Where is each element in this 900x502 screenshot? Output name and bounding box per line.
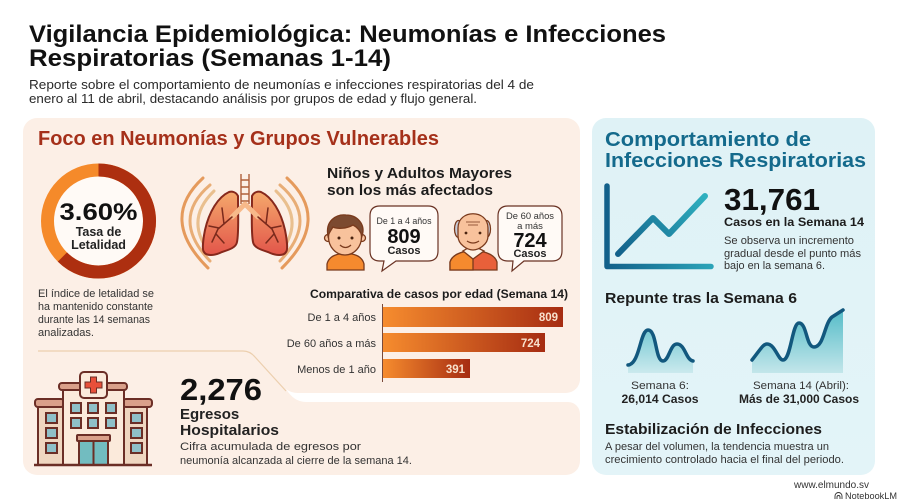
title: Respiratorias (Semanas 1-14) xyxy=(29,45,391,72)
subtitle: enero al 11 de abril, destacando análisis por grupos de edad y flujo general. xyxy=(29,92,477,106)
icon: lungs xyxy=(182,174,308,268)
icon: line chart xyxy=(607,186,711,266)
bar: menos de 1 año xyxy=(297,359,470,378)
stat: egresos hospitalarios: Hospitalarios xyxy=(180,422,279,439)
bar chart: comparativa xyxy=(287,287,568,382)
chart: semana 6: 26,014 Casos xyxy=(622,394,698,406)
stat: 31,761: Casos en la Semana 14 xyxy=(724,215,864,229)
bar: menos de 1 año: Menos de 1 año xyxy=(297,364,376,376)
bar: 60 años a más xyxy=(287,333,545,352)
donut: tasa de letalidad: Letalidad xyxy=(71,238,126,252)
source: www.elmundo.sv xyxy=(793,479,870,491)
heading: niños y adultos xyxy=(327,166,512,199)
letalidad description: El índice de letalidad se xyxy=(38,288,154,300)
panel heading: Infecciones Respiratorias xyxy=(605,149,866,172)
text: estabilización xyxy=(605,422,844,466)
bar: 1 a 4 años xyxy=(308,307,563,327)
letalidad description xyxy=(38,288,154,339)
callout: 724 casos: a más xyxy=(517,221,543,232)
chart: semana 6: Semana 6: xyxy=(631,380,689,392)
panel: infecciones respiratorias xyxy=(592,118,875,475)
bar chart: comparativa: Comparativa de casos por edad (Semana 14) xyxy=(310,287,568,301)
heading: niños y adultos: son los más afectados xyxy=(327,183,493,199)
notebooklm mark: NotebookLM xyxy=(845,491,897,502)
text: estabilización: Estabilización de Infecciones xyxy=(605,422,822,438)
callout: 724 casos: 724 xyxy=(513,230,548,252)
stat: 31,761: 31,761 xyxy=(724,182,820,217)
letalidad description: analizadas. xyxy=(38,327,94,339)
stat: 31,761 xyxy=(724,182,864,272)
chart: semana 14 xyxy=(739,310,859,406)
title: Vigilancia Epidemiológica: Neumonías e Infecciones xyxy=(29,21,666,48)
heading: repunte: Repunte tras la Semana 6 xyxy=(605,291,797,307)
text: estabilización: A pesar del volumen, la tendencia muestra un xyxy=(605,441,829,453)
stat: egresos hospitalarios: 2,276 xyxy=(180,373,262,407)
title xyxy=(29,21,666,72)
panel background xyxy=(592,118,875,475)
heading: niños y adultos: Niños y Adultos Mayores xyxy=(327,166,512,182)
bar: 60 años a más: De 60 años a más xyxy=(287,338,376,350)
donut: tasa de letalidad: Tasa de xyxy=(76,225,121,239)
stat: 31,761: Se observa un incremento xyxy=(724,235,854,247)
letalidad description: durante las 14 semanas xyxy=(38,314,150,326)
panel heading xyxy=(605,128,866,172)
callout: 724 casos xyxy=(498,206,562,271)
donut: tasa de letalidad xyxy=(48,170,150,272)
bar: 1 a 4 años: 809 xyxy=(539,312,558,324)
bar: 60 años a más: 724 xyxy=(521,338,541,350)
callout: 809 casos: Casos xyxy=(387,245,421,257)
separator xyxy=(38,351,286,391)
callout: 724 casos: De 60 años xyxy=(506,211,554,222)
panel heading: Comportamiento de xyxy=(605,128,811,151)
panel heading: Foco en Neumonías y Grupos Vulnerables xyxy=(38,127,439,150)
subtitle: Reporte sobre el comportamiento de neumonías e infecciones respiratorias del 4 de xyxy=(29,78,534,92)
icon: hospital xyxy=(34,372,152,465)
stat: egresos hospitalarios: Cifra acumulada de egresos por xyxy=(180,441,361,453)
callout: 809 casos: 809 xyxy=(387,226,421,248)
stat: 31,761: gradual desde el punto más xyxy=(724,248,861,260)
chart: semana 14: Semana 14 (Abril): xyxy=(753,380,849,392)
subtitle xyxy=(29,78,534,106)
stat: egresos hospitalarios xyxy=(180,373,412,467)
icon: elder xyxy=(450,214,497,270)
stat: 31,761: bajo en la semana 6. xyxy=(724,260,825,272)
callout: 724 casos: Casos xyxy=(513,248,547,260)
callout: 809 casos: De 1 a 4 años xyxy=(376,216,432,227)
stat: egresos hospitalarios: neumonía alcanzada al cierre de la semana 14. xyxy=(180,455,412,467)
chart: semana 14: Más de 31,000 Casos xyxy=(739,394,859,406)
icon: child xyxy=(324,215,366,270)
bar: menos de 1 año: 391 xyxy=(446,364,466,376)
stat: egresos hospitalarios: Egresos xyxy=(180,406,239,423)
bar: 1 a 4 años: De 1 a 4 años xyxy=(308,312,376,324)
chart: semana 6 xyxy=(622,330,698,406)
panel: neumonías xyxy=(23,118,580,475)
letalidad description: ha mantenido constante xyxy=(38,301,153,313)
panel background xyxy=(23,118,580,475)
callout: 809 casos xyxy=(370,206,438,271)
text: estabilización: crecimiento controlado hacia el final del periodo. xyxy=(605,454,844,466)
donut: tasa de letalidad: 3.60% xyxy=(60,199,138,226)
